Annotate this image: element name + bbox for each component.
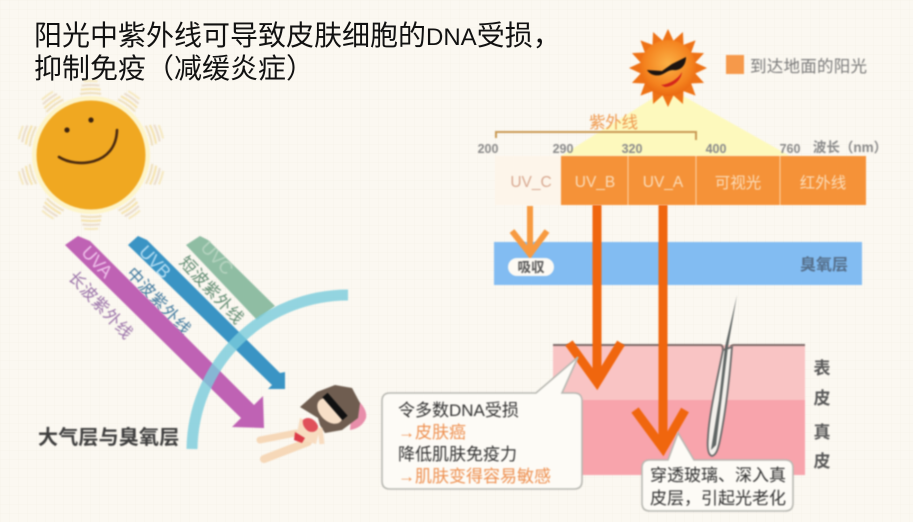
wavelength scale: 400 xyxy=(706,142,726,156)
UVA ray into dermis xyxy=(635,205,685,448)
legend: sunlight reaching the ground: 到达地面的阳光 xyxy=(750,57,867,76)
callout: UVB effects xyxy=(382,357,582,489)
ultraviolet bracket xyxy=(496,113,696,140)
ultraviolet bracket: 紫外线 xyxy=(589,113,638,132)
spectrum bar xyxy=(495,156,866,205)
skin layers xyxy=(553,345,805,475)
skin layer labels: 真 xyxy=(814,423,830,442)
sunbathing woman xyxy=(260,385,366,459)
callout: UVB effects: 降低肌肤免疫力 xyxy=(398,445,517,464)
wavelength scale: 760 xyxy=(780,142,800,156)
title: 抑制免疫（减缓炎症） xyxy=(34,53,314,84)
yellow light beam xyxy=(561,88,790,156)
callout: UVB effects: 令多数DNA受损 xyxy=(398,401,519,420)
callout: UVA effects: 穿透玻璃、深入真 xyxy=(650,466,786,485)
skin layer labels xyxy=(814,359,830,471)
atmosphere arc xyxy=(192,295,348,449)
absorb arrow and label xyxy=(508,206,554,276)
skin layer labels: 表 xyxy=(814,359,830,378)
hair xyxy=(708,295,737,456)
spectrum bar: 可视光 xyxy=(715,174,761,192)
smiling sun xyxy=(17,81,165,229)
absorb arrow and label: 吸収 xyxy=(518,260,545,275)
wavelength scale: 200 xyxy=(478,142,498,156)
UVA arrow xyxy=(65,236,264,428)
wavelength scale: 320 xyxy=(622,142,642,156)
wavelength scale: 290 xyxy=(553,142,573,156)
ozone layer band: 臭氧层 xyxy=(800,255,848,274)
spectrum bar: 红外线 xyxy=(800,174,846,192)
skin layer labels: 皮 xyxy=(814,388,830,408)
UVB arrow: UVB xyxy=(135,242,175,282)
UVA arrow: 长波紫外线 xyxy=(65,268,137,343)
skin layer labels: 皮 xyxy=(814,451,830,471)
wavelength scale: 波长（nm） xyxy=(813,139,887,155)
spectrum bar: UV_C xyxy=(510,174,552,191)
UVC band: UVC xyxy=(197,237,237,279)
cool sun with sunglasses xyxy=(629,29,707,107)
UVB ray into epidermis xyxy=(569,205,621,382)
atmosphere label: 大气层与臭氧层 xyxy=(38,426,179,449)
UVB arrow xyxy=(123,236,285,389)
UVC band xyxy=(176,236,275,328)
spectrum bar: UV_A xyxy=(643,174,684,191)
UVC band: 短波紫外线 xyxy=(176,253,248,328)
UVA arrow: UVA xyxy=(78,242,116,282)
title: 阳光中紫外线可导致皮肤细胞的DNA受损， xyxy=(34,20,561,51)
callout: UVA effects xyxy=(642,433,793,511)
ozone layer band xyxy=(494,242,862,285)
callout: UVB effects: →肌肤变得容易敏感 xyxy=(398,467,551,486)
wavelength scale xyxy=(478,139,887,156)
spectrum bar: UV_B xyxy=(575,174,615,191)
UVB arrow: 中波紫外线 xyxy=(123,264,195,339)
title xyxy=(34,20,561,84)
callout: UVB effects: →皮肤癌 xyxy=(398,423,466,442)
callout: UVA effects: 皮层，引起光老化 xyxy=(650,489,786,508)
